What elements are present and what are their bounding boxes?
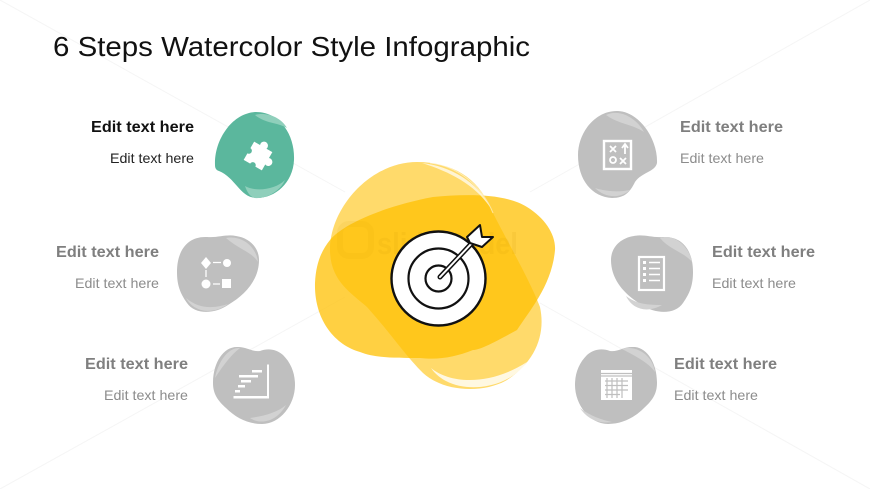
icon: stepped chart: [234, 364, 269, 398]
gray blob: [213, 347, 295, 424]
gray blob: [575, 347, 657, 424]
sublabel: Edit text here: [712, 275, 796, 291]
label: Edit text here: [680, 119, 783, 136]
sublabel: Edit text here: [110, 150, 194, 166]
title: 6 Steps Watercolor Style Infographic: [53, 31, 530, 62]
step 2: flowchart: [56, 235, 259, 312]
watermark: [340, 224, 518, 261]
step 1: puzzle: [91, 112, 294, 198]
green blob: [215, 112, 294, 198]
label: Edit text here: [674, 356, 777, 373]
step 5: checklist: [611, 235, 815, 312]
blob highlight: top arc: [422, 163, 490, 207]
central yellow watercolor blob: [315, 162, 555, 389]
icon: target with arrow: [392, 225, 493, 326]
blob highlights: [626, 237, 692, 309]
step 4: strategy: [578, 111, 783, 198]
blob highlight: bottom crescent: [431, 362, 527, 387]
icon: checklist: [639, 257, 664, 290]
watermark: slideModel: [377, 226, 518, 261]
gray blob: [578, 111, 657, 198]
step 6: calendar: [575, 347, 777, 424]
blob highlights: [215, 348, 286, 422]
blob highlights: [580, 348, 655, 422]
step 3: gantt: [85, 347, 295, 424]
sublabel: Edit text here: [75, 275, 159, 291]
icon: flowchart: [201, 257, 231, 288]
icon: strategy board: [604, 141, 631, 169]
label: Edit text here: [712, 244, 815, 261]
sublabel: Edit text here: [104, 387, 188, 403]
sublabel: Edit text here: [680, 150, 764, 166]
gray blob: [177, 235, 259, 312]
label: Edit text here: [56, 244, 159, 261]
label: Edit text here: [85, 356, 188, 373]
label: Edit text here: [91, 119, 194, 136]
gray blob: [611, 235, 693, 312]
icon: calendar: [601, 370, 632, 400]
icon: puzzle piece: [240, 135, 280, 176]
blob highlights: [186, 237, 258, 311]
sublabel: Edit text here: [674, 387, 758, 403]
blob highlights: [595, 113, 644, 196]
blob highlights: [245, 114, 287, 198]
